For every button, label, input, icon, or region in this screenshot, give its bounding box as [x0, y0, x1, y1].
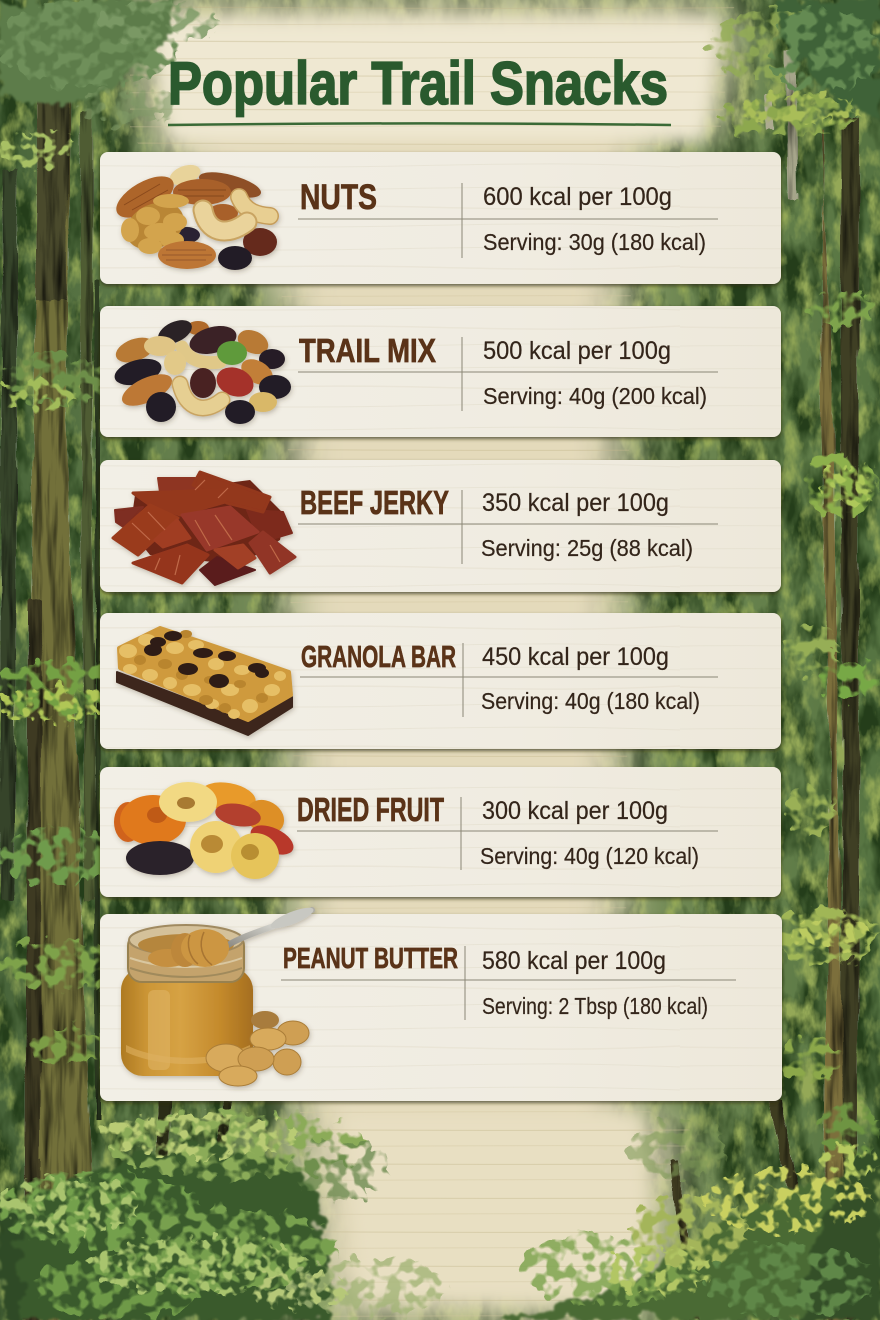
serving: Serving: 30g (180 kcal): [483, 229, 706, 255]
panel: trail mix: [100, 306, 781, 437]
calories: 500 kcal per 100g: [483, 337, 671, 365]
calories: 600 kcal per 100g: [483, 183, 672, 211]
panel: granola bar: [100, 613, 781, 749]
icon: trail mix: [112, 315, 291, 424]
name: PEANUT BUTTER: [283, 943, 458, 975]
icon: dried fruit: [114, 778, 298, 879]
serving: Serving: 2 Tbsp (180 kcal): [482, 993, 708, 1019]
name: NUTS: [300, 178, 377, 217]
calories: 580 kcal per 100g: [482, 947, 666, 975]
name: DRIED FRUIT: [297, 791, 444, 828]
serving: Serving: 40g (120 kcal): [480, 843, 699, 869]
panel: dried fruit: [100, 767, 781, 897]
serving: Serving: 25g (88 kcal): [481, 535, 693, 561]
panel: peanut butter: [100, 904, 782, 1101]
icon: nuts: [110, 161, 277, 270]
calories: 350 kcal per 100g: [482, 489, 669, 517]
icon: peanut butter jar: [121, 904, 316, 1086]
calories: 450 kcal per 100g: [482, 643, 669, 671]
name: GRANOLA BAR: [301, 639, 456, 674]
name: TRAIL MIX: [299, 332, 436, 369]
icon: granola bar: [117, 628, 292, 735]
name: BEEF JERKY: [300, 484, 449, 521]
icon: beef jerky: [113, 472, 295, 585]
panel: beef jerky: [100, 460, 781, 592]
title: Popular Trail Snacks: [168, 50, 668, 117]
serving: Serving: 40g (180 kcal): [481, 688, 700, 714]
panel: nuts: [100, 152, 781, 284]
serving: Serving: 40g (200 kcal): [483, 383, 707, 409]
calories: 300 kcal per 100g: [482, 797, 668, 825]
